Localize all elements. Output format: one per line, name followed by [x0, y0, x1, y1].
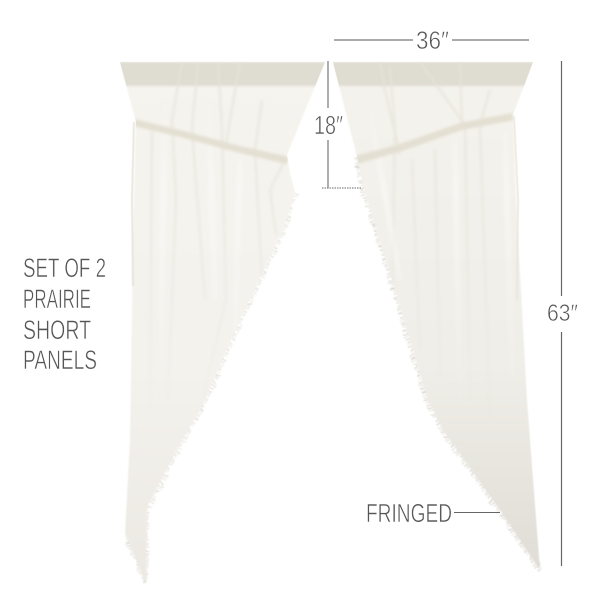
product description text	[23, 253, 106, 375]
dimension: 18 inch height	[314, 61, 361, 188]
callout: fringed: FRINGED	[366, 498, 452, 528]
left curtain panel	[110, 62, 335, 583]
right curtain folds and header	[333, 62, 533, 164]
left tie strap	[132, 122, 134, 286]
right curtain fringe	[357, 157, 540, 570]
left curtain body	[120, 62, 325, 583]
left curtain fringe	[125, 193, 295, 583]
product description text: SET OF 2	[23, 253, 106, 283]
right curtain panel	[325, 62, 540, 570]
product description text: PANELS	[23, 345, 97, 375]
dimension: 63 inch height: 63″	[547, 300, 578, 327]
left curtain folds and header	[120, 62, 325, 208]
right tie strap	[514, 116, 518, 300]
product description text: SHORT	[23, 315, 91, 345]
product description text: PRAIRIE	[23, 284, 91, 314]
dimension: 36 inch width: 36″	[416, 27, 449, 55]
right curtain body	[333, 62, 540, 570]
left gathering band	[133, 119, 290, 164]
dimension: 18 inch height: 18″	[314, 110, 343, 140]
right gathering band	[355, 113, 514, 164]
